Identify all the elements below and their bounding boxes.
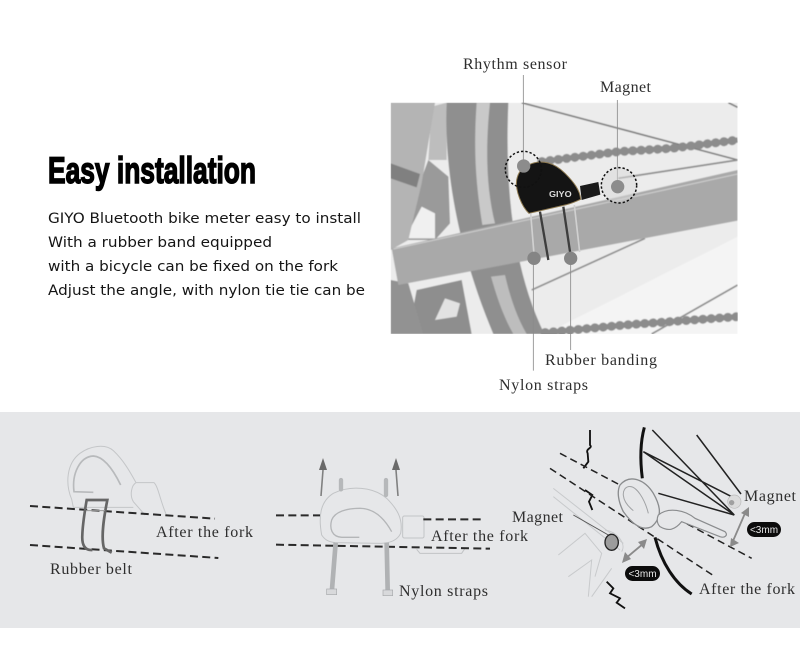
photo: GIYO sensor device bbox=[516, 162, 600, 213]
label: Rubber banding: Rubber banding bbox=[545, 352, 657, 369]
label: Magnet (right): Magnet bbox=[744, 488, 797, 505]
label: Magnet (left): Magnet bbox=[512, 509, 564, 526]
description text block: Adjust the angle, with nylon tie tie can be bbox=[48, 283, 365, 299]
label: Rhythm sensor: Rhythm sensor bbox=[463, 56, 568, 73]
diagram 2: nylon straps fitting bbox=[276, 480, 490, 596]
label: Magnet: Magnet bbox=[600, 79, 652, 96]
label: Nylon straps: Nylon straps bbox=[499, 377, 588, 394]
description text block bbox=[48, 211, 365, 299]
callout markers and leader lines bbox=[505, 75, 637, 371]
arrow: lower gap bbox=[622, 539, 647, 563]
pill: lower <3mm: <3mm bbox=[628, 569, 657, 580]
label: Nylon straps (2): Nylon straps bbox=[399, 583, 488, 600]
label: After the fork (2): After the fork bbox=[431, 528, 528, 545]
photo: GIYO sensor device: GIYO bbox=[549, 190, 572, 199]
arrow: upper gap bbox=[730, 507, 749, 547]
arrow: right pull direction bbox=[392, 458, 400, 496]
label: After the fork (3): After the fork bbox=[699, 581, 795, 598]
description text block: GIYO Bluetooth bike meter easy to install bbox=[48, 211, 361, 227]
diagram 1: rubber belt fitting bbox=[30, 446, 218, 558]
label: Rubber belt: Rubber belt bbox=[50, 561, 133, 578]
arrow: left pull direction bbox=[319, 458, 327, 496]
photo: straps bbox=[531, 205, 580, 260]
label: After the fork (1): After the fork bbox=[156, 524, 253, 541]
description text block: With a rubber band equipped bbox=[48, 235, 272, 251]
pill: upper <3mm bbox=[747, 522, 781, 537]
pill: upper <3mm: <3mm bbox=[750, 525, 778, 536]
panel: grey installation band bbox=[0, 412, 800, 628]
diagram 3: magnet gap alignment bbox=[550, 427, 752, 608]
pill: lower <3mm bbox=[625, 566, 660, 581]
panel: bike photo with sensor bbox=[391, 75, 738, 371]
title: Easy installation bbox=[48, 150, 256, 191]
description text block: with a bicycle can be fixed on the fork bbox=[48, 259, 339, 275]
